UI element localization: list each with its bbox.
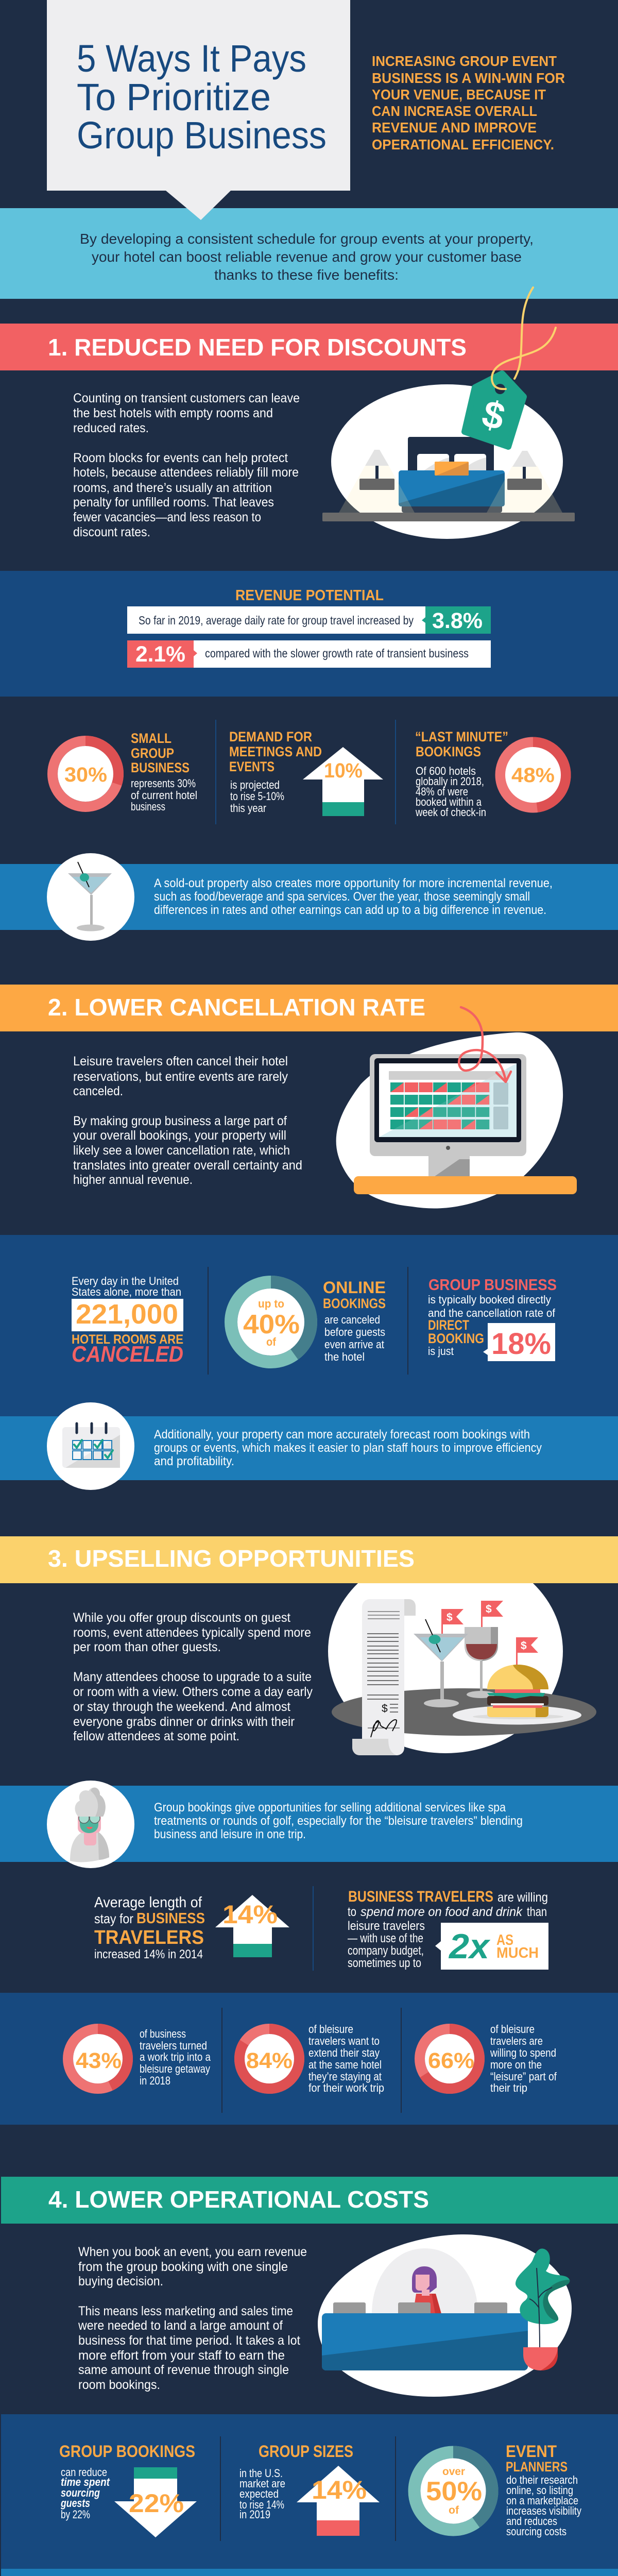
intro band: your hotel can boost reliable revenue and grow your customer base	[92, 249, 522, 265]
stat: event planners: increases visibility	[506, 2504, 581, 2517]
arrow: curved pink arrow to calendar	[459, 1007, 511, 1082]
stat: 43% text: of business	[140, 2027, 186, 2040]
stat: 66% text	[490, 2023, 557, 2094]
stat: business travelers spend more: than	[527, 1905, 547, 1919]
callout: transient rate 2.1%	[127, 640, 491, 668]
stat: online bookings: the hotel	[324, 1350, 365, 1363]
stat: event planners: do their research	[506, 2473, 578, 2486]
section 4 heading: 4. LOWER OPERATIONAL COSTS	[48, 2186, 429, 2213]
stat: 66% text: of bleisure	[490, 2023, 535, 2036]
stat: small group business	[131, 731, 197, 813]
header subtitle: OPERATIONAL EFFICIENCY.	[372, 137, 554, 152]
arrow: up 10%: 10%	[324, 759, 363, 782]
stat: 84% text: of bleisure	[308, 2023, 353, 2036]
section 1: reduced need for discounts	[0, 287, 618, 539]
section 4 text: buying decision.	[78, 2274, 163, 2289]
stat: group sizes: GROUP SIZES	[259, 2442, 353, 2461]
icon: front desk with receptionist and plant	[318, 2234, 572, 2397]
stat: event planners: EVENT	[506, 2442, 557, 2461]
stat: event planners: PLANNERS	[506, 2459, 568, 2475]
donut chart: 66%	[420, 2029, 479, 2089]
section 4 text: When you book an event, you earn revenue	[78, 2245, 307, 2259]
stat: demand for meetings and events: DEMAND FOR	[229, 729, 312, 744]
donut chart: 66%: 66%	[428, 2048, 474, 2073]
donut chart: 30%: 30%	[64, 764, 107, 786]
icon: food and drink on tray: $	[447, 1612, 453, 1623]
stat: average length of stay: stay for	[94, 1911, 133, 1926]
stat: group bookings: by 22%	[61, 2508, 90, 2521]
section 2 text: translates into greater overall certainty and	[73, 1158, 302, 1173]
arrow: down 22%	[114, 2467, 197, 2537]
callout: transient rate 2.1%: compared with the slower growth rate of transient business	[205, 647, 469, 660]
stat: online bookings: are canceled	[324, 1313, 380, 1326]
donut chart: 30%	[53, 741, 118, 807]
arrow: up 14%: 14%	[312, 2476, 367, 2504]
stat: 221,000 rooms canceled	[72, 1275, 183, 1367]
stat: 43% text	[140, 2027, 211, 2087]
section 1 text: the best hotels with empty rooms and	[73, 406, 273, 420]
donut chart: 84%: 84%	[246, 2048, 293, 2073]
section 4 text: more effort from your staff to earn the	[78, 2348, 285, 2363]
section 1 text: Counting on transient customers can leave	[73, 391, 300, 405]
stat: online bookings: ONLINE	[323, 1278, 386, 1297]
header subtitle: YOUR VENUE, BECAUSE IT	[372, 87, 546, 103]
panel: bleisure stats	[0, 1993, 618, 2125]
stat: demand for meetings and events: EVENTS	[229, 759, 274, 774]
panel: section 1 stats	[53, 720, 565, 824]
stat: business travelers spend more: spend more on food and drink	[360, 1905, 523, 1919]
stat: 43% text: in 2018	[140, 2074, 170, 2087]
section 2 text: Leisure travelers often cancel their hotel	[73, 1054, 288, 1069]
band text: Group bookings give opportunities for selling additional services like spa	[154, 1801, 506, 1815]
stat: 43% text: travelers turned	[140, 2039, 207, 2052]
band text	[154, 1428, 542, 1468]
stat: 66% text: their trip	[490, 2081, 527, 2094]
stat: demand for meetings and events: MEETINGS AND	[229, 744, 322, 759]
stat: online bookings	[323, 1278, 386, 1363]
stat: small group business: SMALL	[131, 731, 171, 746]
donut chart: 48%	[501, 742, 565, 808]
icon: receipt	[352, 1599, 416, 1755]
section 1 text: reduced rates.	[73, 421, 149, 435]
stat: 84% text: they’re staying at	[308, 2070, 382, 2083]
section 3 text	[73, 1611, 313, 1743]
section 3 heading: 3. UPSELLING OPPORTUNITIES	[48, 1545, 415, 1572]
stat: average length of stay: TRAVELERS	[94, 1927, 204, 1948]
icon: price tag with string: $	[478, 392, 509, 438]
donut chart: over 50%: of	[449, 2504, 459, 2516]
stat: group bookings: guests	[60, 2497, 90, 2510]
donut chart: 40%: up to	[258, 1297, 284, 1310]
illustration background blob	[336, 1032, 563, 1209]
section 1 text: hotels, because attendees reliably fill more	[73, 465, 299, 480]
callout: group rate 3.8%: So far in 2019, average daily rate for group travel increased by	[139, 614, 414, 627]
stat: last minute bookings: globally in 2018,	[416, 775, 484, 788]
icon: calendar with checks	[47, 1402, 134, 1490]
panel: business traveler stats	[94, 1886, 548, 1971]
title: To Prioritize	[77, 76, 271, 118]
section 2 text: canceled.	[73, 1084, 123, 1098]
stat: demand for meetings and events: this year	[230, 802, 266, 815]
section 4 text: business for that time period. It takes a lot	[78, 2333, 300, 2348]
stat: online bookings: before guests	[324, 1326, 385, 1338]
callout: transient rate 2.1%: 2.1%	[135, 642, 185, 667]
panel: section 2 stats	[0, 1235, 618, 1416]
stat: average length of stay: increased 14% in 2014	[94, 1947, 203, 1961]
panel: operational stats	[1, 2414, 618, 2569]
band text	[154, 1801, 523, 1841]
stat: event planners: online, so listing	[506, 2484, 573, 2497]
icon: food and drink on tray: $	[486, 1603, 492, 1615]
section 3 heading	[0, 1536, 618, 1583]
section 1 text: discount rates.	[73, 525, 150, 539]
icon: food and drink on tray	[332, 1601, 596, 1736]
intro band: By developing a consistent schedule for group events at your property,	[80, 231, 534, 247]
callout: 2x as much: MUCH	[496, 1945, 539, 1961]
section 2 heading	[0, 985, 618, 1031]
stat: last minute bookings: 48% of were	[416, 785, 468, 798]
stat: group bookings: can reduce	[61, 2466, 107, 2479]
stat: business travelers spend more: BUSINESS TRAVELERS	[348, 1888, 493, 1905]
section 2: lower cancellation rate	[0, 985, 618, 1209]
revenue potential heading: REVENUE POTENTIAL	[235, 587, 384, 604]
arrow: up 14%	[215, 1895, 289, 1957]
header subtitle	[372, 53, 565, 152]
donut chart: 43%: 43%	[76, 2048, 122, 2073]
icon: food and drink on tray: $	[521, 1640, 527, 1652]
stat: event planners	[506, 2442, 581, 2538]
arrow: up 14%: 14%	[222, 1900, 278, 1929]
stat: last minute bookings: “LAST MINUTE”	[415, 729, 508, 744]
donut chart: 40%	[231, 1282, 311, 1362]
section 1 text: Room blocks for events can help protect	[73, 451, 288, 465]
stat: event planners: and reduces	[506, 2515, 557, 2528]
callout: 2x as much: AS	[496, 1932, 513, 1948]
band text	[154, 876, 553, 917]
section 3 text: or room with a view. Others come a day early	[73, 1685, 313, 1699]
stat: demand for meetings and events: is projected	[230, 778, 280, 791]
arrow: up 10%	[303, 747, 383, 816]
band text: Additionally, your property can more accurately forecast room bookings with	[154, 1428, 530, 1442]
section 2 text: likely see a lower cancellation rate, which	[73, 1143, 290, 1158]
panel: revenue potential	[0, 571, 618, 697]
panel: spa services band	[0, 1781, 618, 1868]
stat: online bookings: even arrive at	[324, 1338, 384, 1351]
section 4 heading	[1, 2177, 618, 2224]
stat: group bookings: sourcing	[61, 2486, 100, 2499]
stat: group business direct booking 18%: DIRECT	[428, 1317, 469, 1333]
section 2 text: By making group business a large part of	[73, 1114, 287, 1128]
donut chart: over 50%: 50%	[426, 2477, 482, 2506]
stat: business travelers spend more: leisure travelers	[348, 1919, 425, 1933]
stat: small group business: GROUP	[131, 745, 174, 761]
title: 5 Ways It Pays	[77, 37, 306, 80]
title speech bubble	[47, 0, 350, 220]
section 3: upselling opportunities	[0, 1536, 618, 1755]
donut chart: 48%: 48%	[511, 764, 555, 787]
stat: 66% text: willing to spend	[490, 2046, 556, 2059]
section 4 text: This means less marketing and sales time	[78, 2304, 293, 2318]
intro band	[0, 208, 618, 299]
stat: last minute bookings: booked within a	[416, 795, 482, 808]
stat: 221,000 rooms canceled: States alone, more than	[72, 1285, 181, 1298]
donut chart: 40%: of	[266, 1335, 277, 1348]
section 2 text: your overall bookings, your property will	[73, 1128, 286, 1143]
stat: group bookings: GROUP BOOKINGS	[59, 2442, 195, 2461]
illustration background blob	[331, 384, 563, 539]
band text: treatments or rounds of golf, especially for the “bleisure travelers” blending	[154, 1814, 523, 1828]
section 1 text: fewer vacancies—and less reason to	[73, 510, 261, 524]
donut chart: 84%	[239, 2029, 299, 2089]
arrow: down 22%: 22%	[129, 2489, 184, 2518]
section 1 heading: 1. REDUCED NEED FOR DISCOUNTS	[48, 334, 467, 361]
stat: 84% text	[308, 2023, 384, 2094]
stat: 221,000 rooms canceled: HOTEL ROOMS ARE	[72, 1332, 183, 1347]
stat: group business direct booking 18%: and the cancellation rate of	[428, 1307, 556, 1319]
header subtitle: BUSINESS IS A WIN-WIN FOR	[372, 70, 565, 86]
band text: differences in rates and other earnings can add up to a big difference in revenue.	[154, 903, 546, 917]
stat: business travelers spend more	[348, 1888, 548, 1970]
section 1 text: rooms, and there’s usually an attrition	[73, 481, 272, 495]
stat: last minute bookings	[415, 729, 508, 819]
stat: online bookings: BOOKINGS	[323, 1296, 386, 1311]
stat: 84% text: for their work trip	[308, 2081, 384, 2094]
stat: 221,000 rooms canceled: 221,000	[76, 1299, 178, 1330]
section 4: lower operational costs	[1, 2177, 618, 2397]
stat: small group business: BUSINESS	[131, 760, 190, 775]
stat: small group business: business	[131, 800, 165, 813]
stat: last minute bookings: BOOKINGS	[416, 744, 481, 759]
stat: 221,000 rooms canceled: Every day in the United	[72, 1275, 179, 1287]
section 4 text: same amount of revenue through single	[78, 2363, 289, 2377]
title	[77, 37, 327, 157]
stat: demand for meetings and events: to rise 5-10%	[230, 790, 284, 803]
icon: computer with booking calendar	[354, 1054, 577, 1194]
section 4 text: room bookings.	[78, 2378, 160, 2392]
section 3 text: or stay through the weekend. And almost	[73, 1700, 290, 1714]
section 3 text: fellow attendees at some point.	[73, 1729, 239, 1743]
band text: A sold-out property also creates more opportunity for more incremental revenue,	[154, 876, 553, 890]
band text: business and leisure in one trip.	[154, 1827, 306, 1841]
header subtitle: REVENUE AND IMPROVE	[372, 120, 537, 135]
stat: group sizes: expected	[239, 2487, 279, 2500]
donut chart: over 50%	[414, 2452, 492, 2530]
section 1 text: penalty for unfilled rooms. That leaves	[73, 495, 274, 510]
section 3 text: per room than other guests.	[73, 1640, 221, 1654]
stat: small group business: represents 30%	[131, 777, 196, 790]
stat: group business direct booking 18%: GROUP BUSINESS	[428, 1276, 557, 1294]
stat: business travelers spend more: are willing	[497, 1890, 548, 1905]
stat: group bookings: time spent	[61, 2476, 110, 2488]
header section	[0, 0, 618, 299]
stat: event planners: on a marketplace	[506, 2494, 578, 2507]
stat: 84% text: at the same hotel	[308, 2058, 382, 2071]
stat: group business direct booking 18%: is just	[428, 1345, 454, 1358]
arrow: up 14%	[297, 2466, 380, 2536]
donut chart: 43%	[68, 2029, 128, 2089]
stat: group business direct booking 18%: 18%	[491, 1327, 551, 1361]
stat: 43% text: bleisure getaway	[140, 2062, 210, 2075]
stat: 66% text: travelers are	[490, 2035, 543, 2047]
icon: price tag with string	[465, 287, 556, 447]
section 1 text	[73, 391, 300, 539]
stat: group sizes: to rise 14%	[239, 2498, 284, 2511]
band text: such as food/beverage and spa services. Over the year, those seemingly small	[154, 890, 530, 904]
band text: groups or events, which makes it easier to plan staff hours to improve efficiency	[154, 1441, 542, 1455]
stat: 66% text: “leisure” part of	[490, 2070, 557, 2083]
panel: incremental revenue band	[0, 853, 618, 941]
panel: length of stay benefits	[1, 2569, 618, 2576]
stat: business travelers spend more: company budget,	[348, 1944, 424, 1958]
callout: group rate 3.8%	[127, 606, 491, 634]
stat: average length of stay: Average length of	[94, 1894, 202, 1911]
section 2 text: higher annual revenue.	[73, 1173, 193, 1187]
stat: group sizes	[239, 2442, 353, 2521]
section 3 text: While you offer group discounts on guest	[73, 1611, 290, 1625]
stat: group bookings	[59, 2442, 195, 2521]
stat: 221,000 rooms canceled: CANCELED	[72, 1342, 183, 1367]
section 3 text: rooms, event attendees typically spend more	[73, 1625, 311, 1640]
section 4 text	[78, 2245, 307, 2392]
band text: and profitability.	[154, 1454, 234, 1468]
section 2 text: reservations, but entire events are rarely	[73, 1070, 288, 1084]
header subtitle: INCREASING GROUP EVENT	[372, 53, 557, 69]
title: Group Business	[77, 114, 327, 157]
section 4 text: were needed to land a large amount of	[78, 2318, 283, 2333]
stat: business travelers spend more: sometimes up to	[348, 1956, 421, 1970]
stat: average length of stay	[94, 1894, 205, 1961]
stat: group business direct booking 18%: BOOKING	[428, 1331, 484, 1346]
icon: receipt: $	[382, 1703, 388, 1715]
icon: martini	[47, 853, 134, 941]
stat: small group business: of current hotel	[131, 789, 197, 802]
icon: hotel bed with lamps	[322, 437, 575, 521]
section 3 text: Many attendees choose to upgrade to a suite	[73, 1670, 312, 1684]
stat: 43% text: a work trip into a	[140, 2050, 211, 2063]
stat: last minute bookings: week of check-in	[415, 806, 486, 819]
stat: 66% text: more on the	[490, 2058, 542, 2071]
stat: 84% text: extend their stay	[308, 2046, 380, 2059]
panel: forecasting band	[0, 1402, 618, 1490]
intro band: thanks to these five benefits:	[214, 267, 399, 283]
stat: group sizes: in the U.S.	[239, 2467, 283, 2480]
stat: last minute bookings: Of 600 hotels	[416, 765, 476, 777]
section 2 text	[73, 1054, 302, 1187]
donut chart: 40%: 40%	[243, 1310, 300, 1340]
section 4 text: from the group booking with one single	[78, 2260, 288, 2274]
stat: average length of stay: BUSINESS	[136, 1910, 205, 1927]
stat: demand for meetings and events	[229, 729, 322, 815]
stat: group business direct booking 18%	[428, 1276, 557, 1361]
stat: 84% text: travelers want to	[308, 2035, 380, 2047]
callout: 2x as much: 2x	[448, 1927, 491, 1966]
callout: group rate 3.8%: 3.8%	[432, 608, 483, 633]
header subtitle: CAN INCREASE OVERALL	[372, 103, 537, 119]
section 3 text: everyone grabs dinner or drinks with their	[73, 1715, 295, 1729]
stat: group sizes: in 2019	[239, 2508, 270, 2521]
section 1 heading	[0, 324, 618, 370]
stat: business travelers spend more: to	[348, 1905, 356, 1919]
callout: 2x as much	[435, 1923, 548, 1970]
section 2 heading: 2. LOWER CANCELLATION RATE	[48, 994, 425, 1021]
stat: group business direct booking 18%: is typically booked directly	[428, 1293, 551, 1306]
stat: event planners: sourcing costs	[506, 2525, 566, 2538]
stat: group sizes: market are	[239, 2477, 285, 2490]
donut chart: over 50%: over	[442, 2466, 465, 2478]
illustration background blob	[328, 1549, 563, 1753]
icon: spa woman	[47, 1781, 134, 1868]
stat: business travelers spend more: — with use of the	[348, 1931, 423, 1945]
